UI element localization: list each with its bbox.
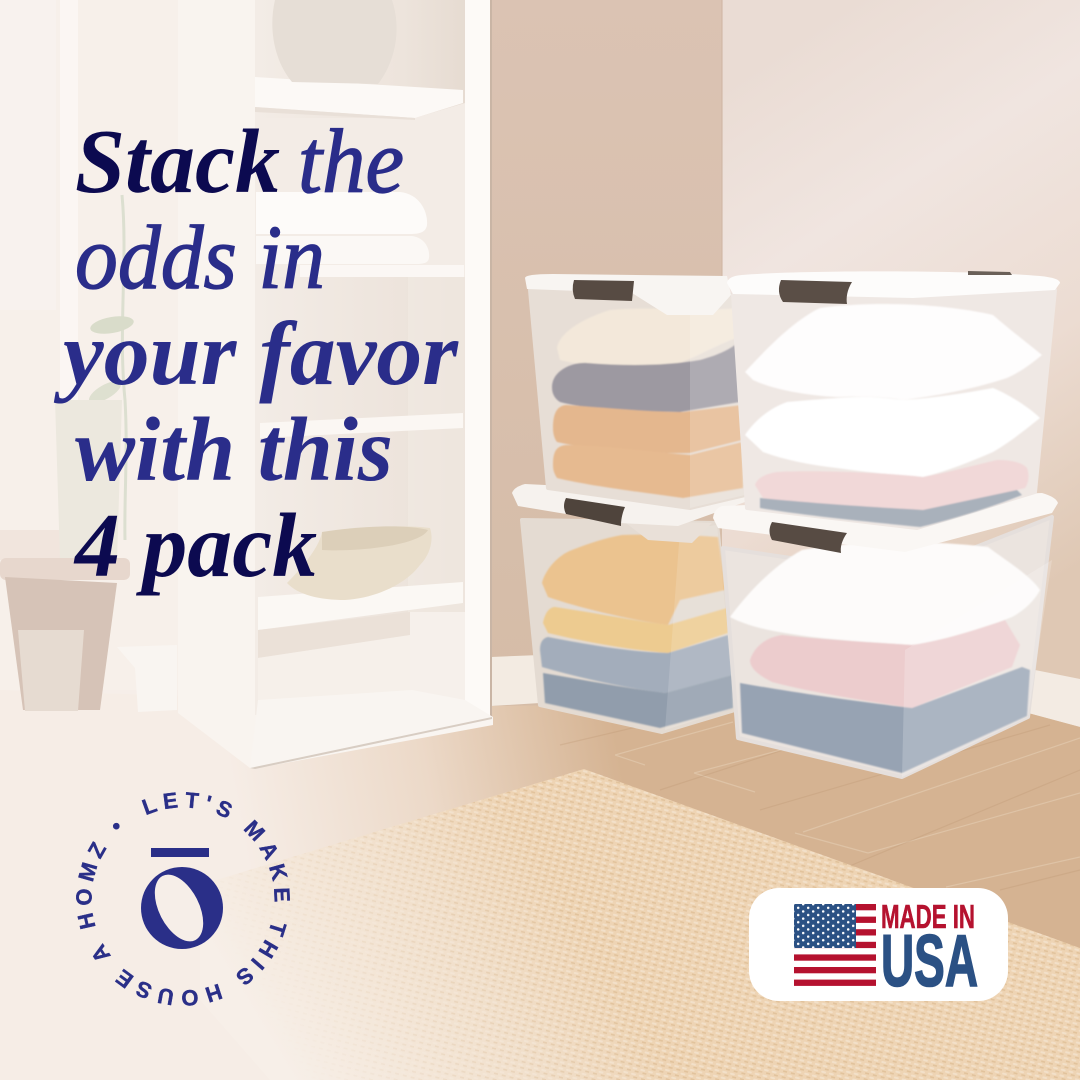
bin body <box>723 517 1052 777</box>
bin latch <box>573 280 634 301</box>
usa label: USA <box>881 921 978 1002</box>
headline line 2: odds in <box>75 207 325 308</box>
headline line 1 <box>75 111 404 212</box>
wooden floor <box>0 690 1080 1080</box>
vase on shelf <box>272 0 397 84</box>
storage bin: back left <box>525 274 745 508</box>
woven basket <box>287 526 432 600</box>
bin body <box>733 290 1055 528</box>
bin lid <box>713 493 1058 552</box>
brand seal <box>76 792 290 1006</box>
bin contents <box>745 304 1042 527</box>
headline line 4: with this <box>75 399 393 500</box>
side wall haze <box>690 296 745 508</box>
bin latch <box>770 522 847 553</box>
headline line 5: 4 pack <box>73 495 317 596</box>
side wall haze <box>665 525 735 730</box>
circular tagline: LET'S MAKE THIS HOUSE A HOMZ • <box>76 792 290 1006</box>
shelf back <box>255 0 466 715</box>
bin lid <box>512 484 745 526</box>
shelf left panel <box>178 0 258 768</box>
rug <box>200 769 1080 1080</box>
bin contents <box>540 535 733 728</box>
side wall haze <box>902 560 1052 777</box>
bin contents <box>730 542 1040 773</box>
bin contents <box>552 308 743 498</box>
storage bin: back right <box>727 271 1060 528</box>
shelving unit <box>178 0 493 769</box>
bin latch <box>779 280 852 304</box>
floor plank lines <box>615 722 1080 887</box>
made in usa badge <box>749 888 1008 1002</box>
headline <box>53 111 460 596</box>
bin body <box>530 290 745 508</box>
american flag icon <box>794 904 876 986</box>
storage bin: bottom right <box>713 493 1058 777</box>
made in label: MADE IN <box>881 898 975 935</box>
storage bin: bottom left <box>512 484 745 732</box>
logo: o with macron <box>141 848 223 949</box>
under-lid tab <box>622 520 712 543</box>
headline line 1: the <box>298 111 404 212</box>
bin lid <box>727 271 1060 298</box>
shelf right post <box>465 0 491 716</box>
bin body <box>522 520 735 732</box>
folded towels <box>256 192 429 264</box>
window and plant <box>0 0 180 712</box>
headline line 1: Stack <box>75 111 280 212</box>
bin lid <box>525 274 731 315</box>
floor plank shading <box>560 712 1080 890</box>
headline line 3: your favor <box>53 303 460 404</box>
bin latch <box>564 498 625 526</box>
